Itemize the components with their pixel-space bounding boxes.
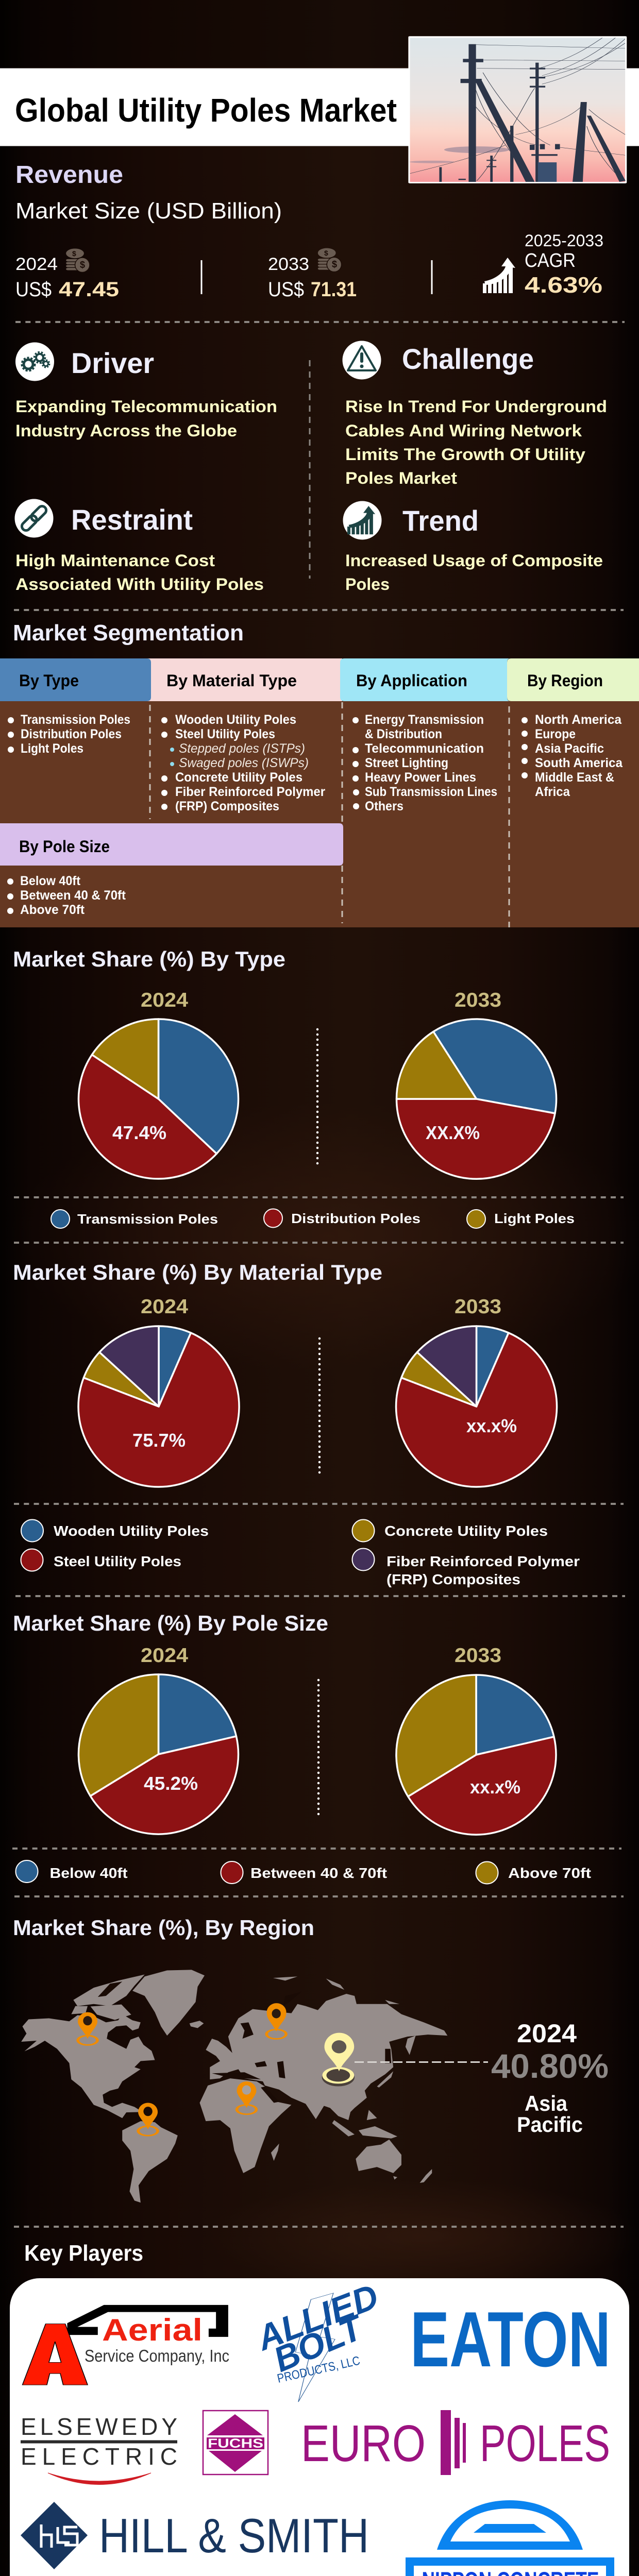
value: XX.X%: XX.X% [426,1122,480,1143]
list: by type: Distribution Poles [21,727,122,741]
legend: pole size: Between 40 & 70ft [250,1865,387,1881]
value: 45.2%: 45.2% [144,1773,198,1794]
pie chart: pole size 2033 [396,1675,556,1835]
legend: pole size: Below 40ft [49,1865,128,1881]
heading: challenge: Challenge [402,343,534,375]
list: by application: Energy Transmission [365,713,484,727]
list: by material type: Steel Utility Poles [175,727,275,741]
text: challenge [345,397,607,487]
header: by application: By Application [356,671,467,690]
list: by region: Middle East & [535,770,614,785]
panel: trend [343,501,603,594]
legend: type [51,1209,575,1228]
heading: key players: Key Players [24,2241,143,2266]
list: by material type: Stepped poles (ISTPs) [179,741,305,756]
list: by material type: Swaged poles (ISWPs) [179,756,309,770]
list: by material type: Concrete Utility Poles [175,770,302,785]
pin: middle east and africa [237,2081,256,2114]
panel: challenge [342,341,607,487]
icon: coins 2033: $ [324,249,328,257]
text: restraint: High Maintenance Cost [15,551,215,570]
stat: CAGR: 4.63% [525,273,602,298]
header: by region [507,658,639,701]
logo: allied bolt [250,2277,383,2402]
text: restraint [15,551,264,594]
header: by region: By Region [527,671,603,690]
list: by region [522,713,623,799]
logo: allied bolt: PRODUCTS, LLC [276,2353,361,2386]
stat: 2024 revenue: US$ [15,278,52,301]
logo: nippon concrete [410,2500,610,2576]
list: by application: Street Lighting [365,756,448,770]
legend: type: Transmission Poles [77,1211,218,1227]
stat: 2033 revenue: 71.31 [311,278,357,301]
legend: material type: (FRP) Composites [386,1571,520,1587]
heading: restraint: Restraint [71,503,193,536]
legend: pole size: Above 70ft [508,1865,591,1881]
logo: allied bolt: BOLT [268,2307,371,2380]
callout: asia pacific share: Pacific [517,2112,583,2137]
dashed leader line [355,2061,488,2063]
text: challenge: Rise In Trend For Underground [345,397,607,416]
list: by application: Sub Transmission Lines [365,785,497,799]
text: trend: Increased Usage of Composite [345,551,603,570]
list: by pole size [7,874,126,917]
legend: material type: Wooden Utility Poles [54,1523,209,1539]
title: Global Utility Poles Market [15,92,397,129]
legend: material type: Steel Utility Poles [54,1553,181,1569]
legend: material type [21,1520,580,1587]
pie chart: type 2033 [396,1019,557,1179]
list: by region: South America [535,756,623,770]
label: 2033: 2033 [455,1296,501,1318]
legend: type: Light Poles [494,1211,575,1226]
heading: market segmentation: Market Segmentation [13,620,244,646]
label: 2024: 2024 [141,989,188,1011]
icon: coins 2024: $ [80,260,85,270]
logo: euro poles: EURO [301,2415,426,2472]
text: restraint: Associated With Utility Poles [15,575,264,594]
divider [201,260,202,294]
heading: trend: Trend [402,504,479,537]
icon: growth chart [343,501,381,540]
logo: hill and smith: HILL & SMITH [99,2509,369,2563]
list: by region: North America [535,713,622,727]
icon: coins 2033 [318,248,342,272]
legend: type: Distribution Poles [291,1211,421,1226]
panel: restraint [14,499,264,594]
list: by region: Europe [535,727,576,741]
header: by type [0,658,151,701]
value: xx.x%: xx.x% [466,1415,517,1436]
logo: aerial service company: Aerial [102,2313,203,2347]
logo: allied bolt: ALLIED [250,2277,383,2359]
list: by application: Telecommunication [365,741,484,756]
icon: gears [15,342,54,381]
value: xx.x%: xx.x% [470,1776,520,1798]
heading: driver: Driver [71,347,154,379]
text: challenge: Cables And Wiring Network [345,421,582,440]
divider [431,260,433,294]
world map [21,1970,447,2202]
text: challenge: Poles Market [345,469,457,487]
list: by pole size: Between 40 & 70ft [20,888,126,903]
legend: pole size [15,1860,591,1884]
list: by type: Transmission Poles [21,713,130,727]
stat: CAGR: CAGR [525,250,576,272]
pin: north america [78,2012,97,2045]
value: 47.4%: 47.4% [112,1122,166,1143]
stat: 2024 revenue: 2024 [15,255,58,274]
stat: CAGR [483,231,603,298]
logo: aerial service company [22,2305,229,2385]
heading: revenue: Revenue [15,161,123,189]
pie chart: material 2024 [78,1326,239,1487]
list: by material type: Wooden Utility Poles [175,713,296,727]
stat: 2033 revenue [268,248,357,301]
text: driver: Expanding Telecommunication [15,397,277,416]
text: trend: Poles [345,575,390,594]
list: by material type: Fiber Reinforced Polymer [175,785,325,799]
callout: asia pacific share: 2024 [517,2019,577,2048]
heading: market share by material type: Market Share (%) By Material Type [13,1260,382,1284]
header: by application [340,658,510,701]
logo: hill and smith [21,2502,369,2569]
logo: fuchs [203,2411,268,2475]
legend: material type: Concrete Utility Poles [384,1523,548,1539]
pie chart: type 2024 [78,1019,238,1179]
heading: market share by type: Market Share (%) By Type [13,947,285,971]
list: by material type: (FRP) Composites [175,799,279,814]
list: by application: Others [365,799,403,814]
header: by type: By Type [19,671,79,690]
subheading: market size: Market Size (USD Billion) [15,198,282,224]
legend: material type: Fiber Reinforced Polymer [386,1553,580,1569]
list: by pole size: Above 70ft [20,903,85,917]
text: driver [15,397,277,440]
logo: elsewedy electric: ELECTRIC [21,2443,177,2470]
icon: growth arrow [483,258,515,293]
stat: 2024 revenue: 47.45 [59,278,119,301]
pie chart: pole size 2024 [78,1674,238,1834]
list: by material type [161,713,325,814]
list: by type [8,713,130,756]
panel: market segmentation table [0,658,639,927]
heading: market share by region: Market Share (%), By Region [13,1916,314,1940]
text: challenge: Limits The Growth Of Utility [345,445,585,464]
photo: utility poles at dusk [408,36,627,183]
callout: asia pacific share: Asia [525,2091,568,2115]
panel: driver [15,342,277,440]
pin: south america [138,2103,158,2136]
icon: coins 2024: $ [72,249,76,258]
label: 2024: 2024 [141,1296,188,1318]
list: by application: Heavy Power Lines [365,770,476,785]
pie chart: material 2033 [396,1326,557,1487]
header: by material type [146,658,342,701]
list: by region: Asia Pacific [535,741,604,756]
title band [0,68,639,146]
label: 2024: 2024 [141,1645,188,1667]
header: by pole size [0,823,343,866]
icon: warning triangle [342,341,381,379]
header: by material type: By Material Type [166,671,297,690]
logo: elsewedy electric: ELSEWEDY [21,2413,177,2440]
list: by pole size: Below 40ft [20,874,81,888]
stat: 2033 revenue: US$ [268,278,304,301]
stat: CAGR: 2025-2033 [525,231,603,250]
pin: asia pacific highlighted [322,2033,355,2087]
callout: asia pacific share [491,2019,609,2137]
logo: fuchs: FUCHS [208,2436,263,2451]
text: driver: Industry Across the Globe [15,421,237,440]
icon: chain link [14,499,54,538]
label: 2033: 2033 [455,989,501,1011]
panel: key players logos [10,2277,629,2576]
callout: asia pacific share: 40.80% [491,2047,609,2085]
list: by region: Africa [535,785,570,799]
pin: europe [266,2003,287,2039]
list: by application: & Distribution [365,727,442,741]
icon: coins 2024 [66,248,90,272]
logo: euro poles [301,2410,610,2475]
list: by type: Light Poles [21,741,83,756]
logo: elsewedy electric [21,2413,177,2484]
text: trend [345,551,603,594]
header: by pole size: By Pole Size [19,837,110,856]
value: 75.7%: 75.7% [132,1430,186,1451]
stat: 2033 revenue: 2033 [268,255,309,274]
list: by application [352,713,497,814]
heading: market share by pole size: Market Share (%) By Pole Size [13,1611,328,1635]
icon: coins 2033: $ [332,259,337,269]
logo: aerial service company: Service Company, Inc [85,2346,229,2365]
label: 2033: 2033 [455,1645,501,1667]
stat: 2024 revenue [15,248,119,301]
